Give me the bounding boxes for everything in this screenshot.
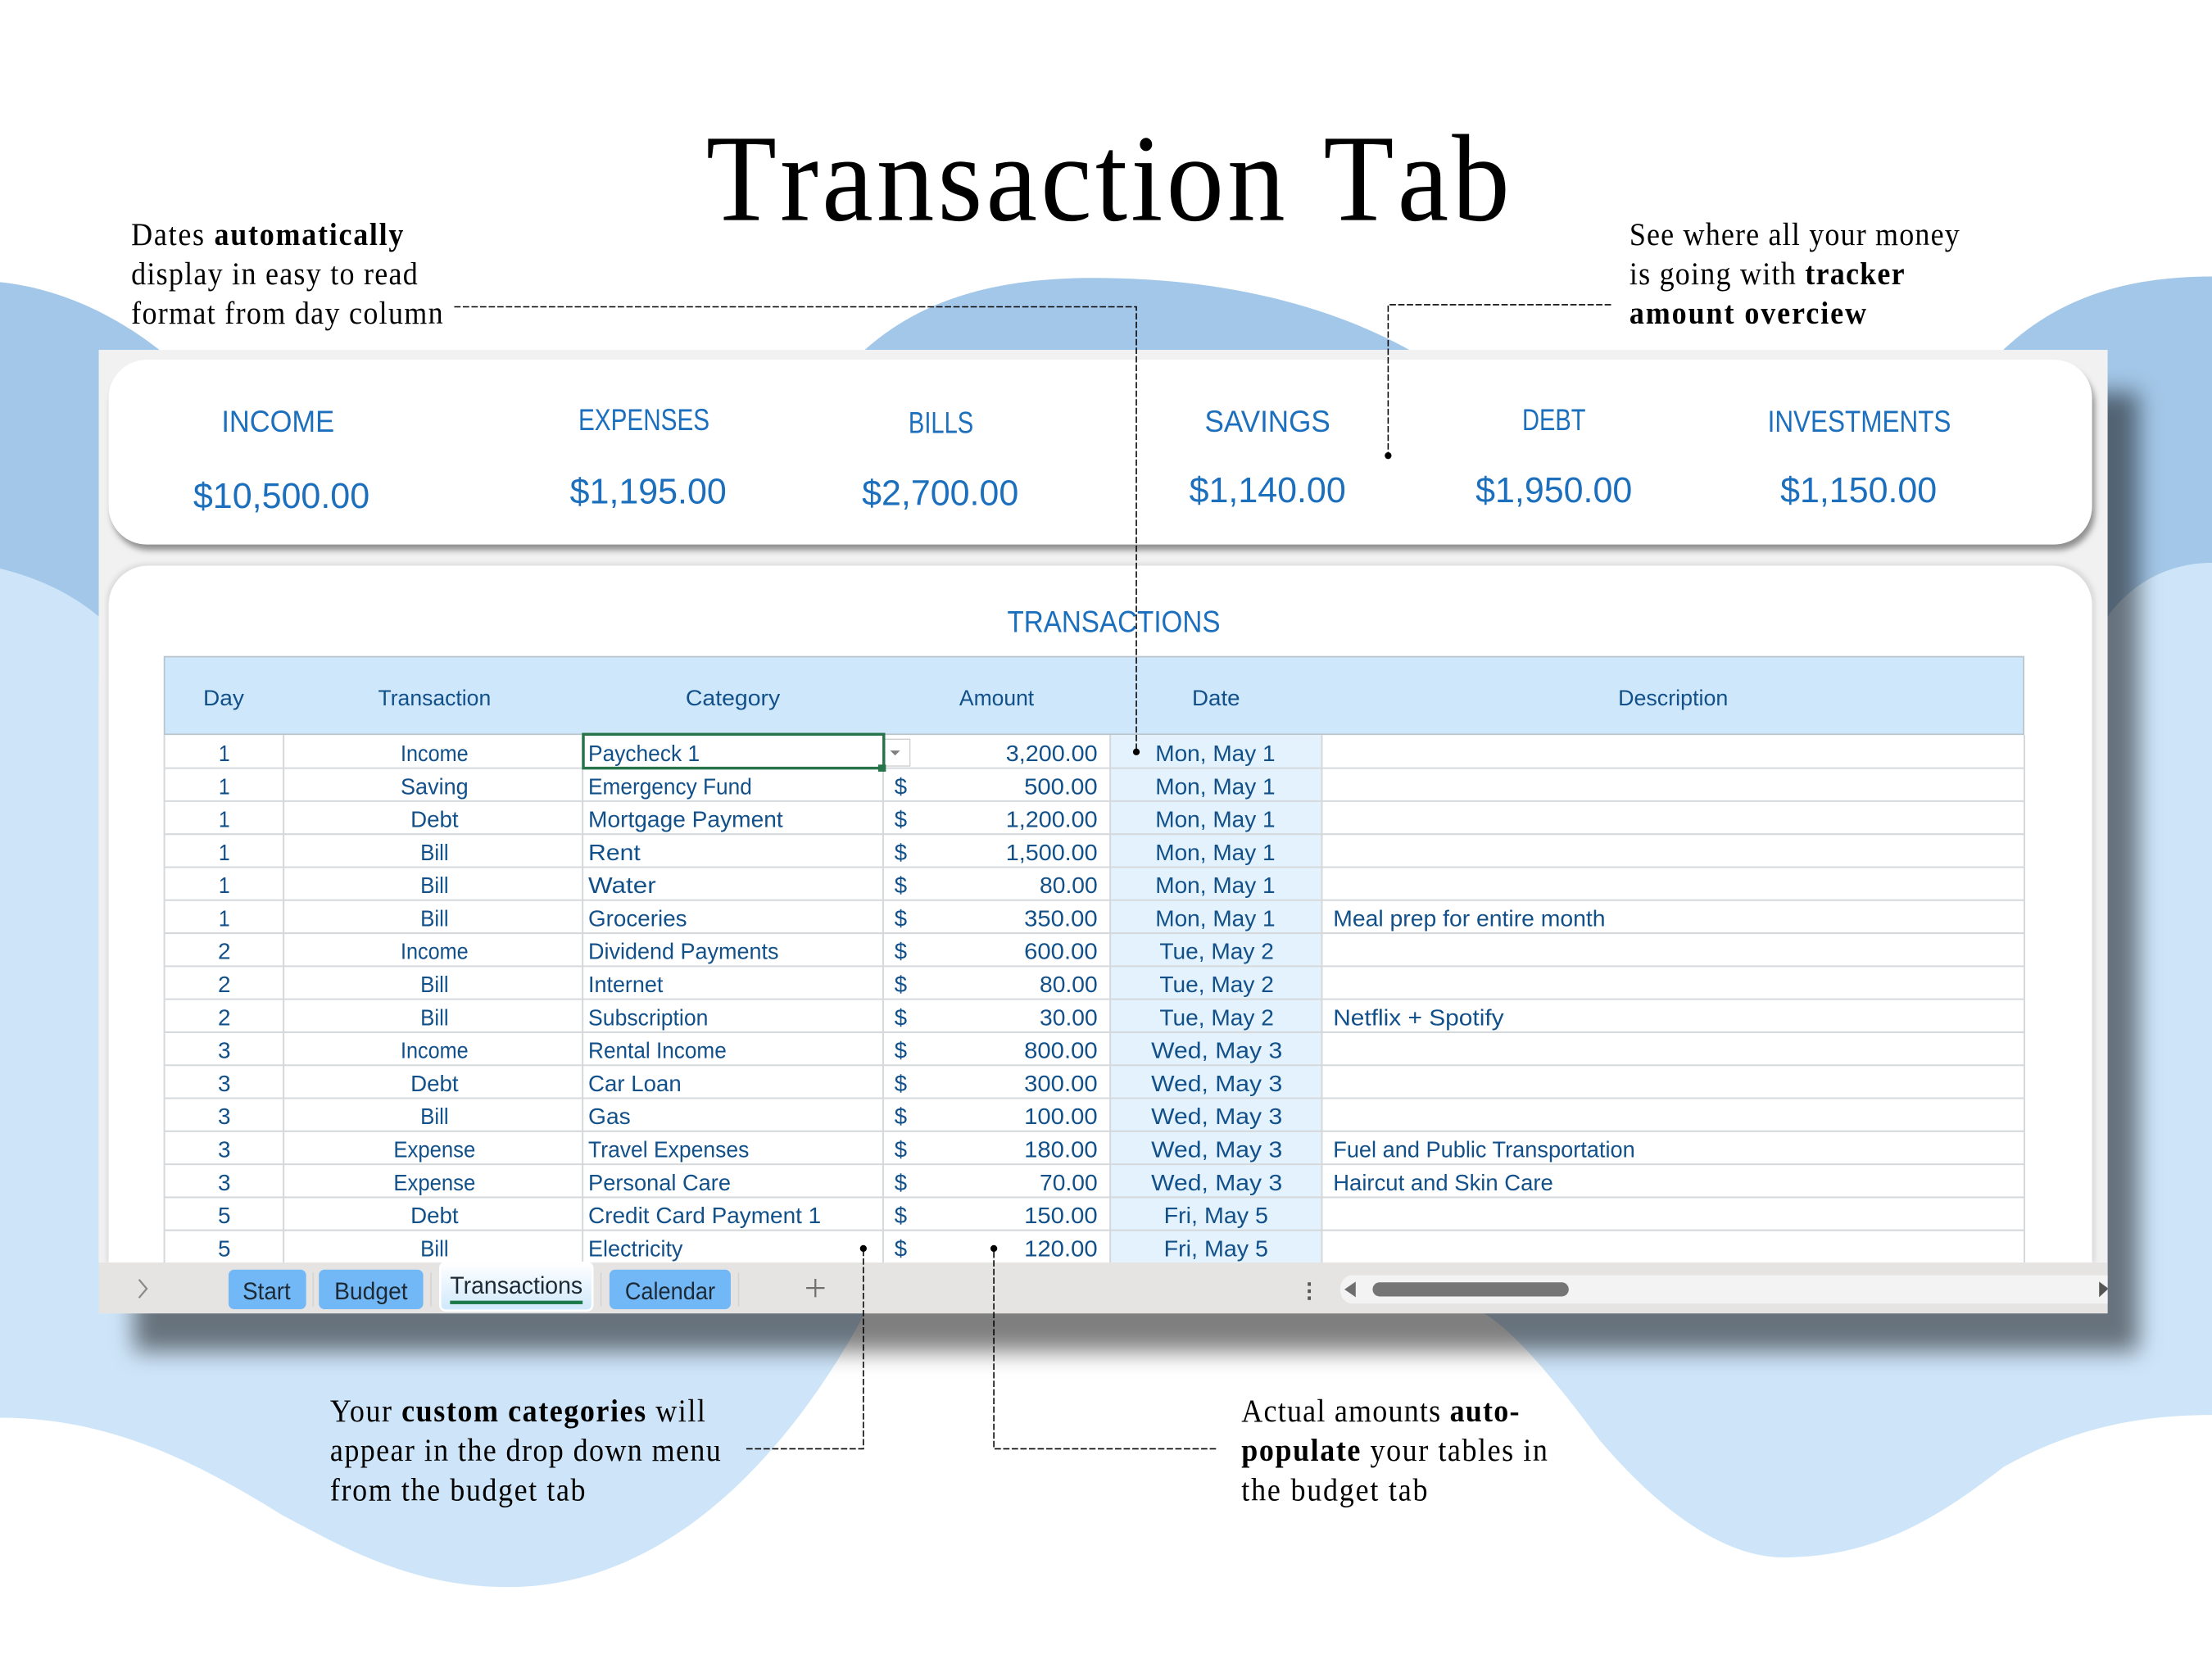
row 16: $ (895, 1235, 907, 1261)
callout: automatic dates (131, 218, 443, 332)
tab: Budget (319, 1270, 424, 1309)
callout: auto-populate: Actual amounts auto- (1241, 1394, 1519, 1429)
callout: auto-populate: populate your tables in (1241, 1434, 1548, 1468)
callout: tracker overview: See where all your money (1630, 218, 1960, 252)
row 10: Income (401, 1038, 469, 1063)
row 2: Saving (401, 773, 469, 799)
row 10: Rental Income (588, 1038, 727, 1063)
row 14: Personal Care (588, 1170, 731, 1195)
row 1: 3,200.00 (1006, 741, 1098, 766)
table header row: Date (1192, 686, 1240, 710)
row 11: 3 (218, 1071, 231, 1096)
row 13: Wed, May 3 (1151, 1137, 1282, 1163)
background wave: light blue shape (0, 563, 2212, 1587)
row 8: 2 (218, 972, 231, 997)
row 9: Subscription (588, 1004, 708, 1030)
row 1: 1 (219, 741, 230, 766)
more options icon (1308, 1282, 1311, 1300)
arrow: categories to dropdown (746, 1245, 867, 1448)
row 15: 5 (218, 1203, 231, 1228)
summary: debt: DEBT (1522, 402, 1585, 437)
row 11: $ (895, 1071, 907, 1096)
row 15 (218, 1203, 1268, 1228)
row 5: Water (588, 873, 656, 898)
chevron icon (139, 1280, 147, 1298)
callout: automatic dates: Dates automatically (131, 218, 404, 252)
row 11: Wed, May 3 (1151, 1071, 1282, 1096)
row 12: Wed, May 3 (1151, 1104, 1282, 1129)
row 14: $ (895, 1170, 907, 1195)
callout: automatic dates: format from day column (131, 297, 443, 332)
scrollbar (1340, 1276, 2108, 1303)
summary: investments: INVESTMENTS (1768, 404, 1951, 438)
row 4: Bill (420, 840, 449, 865)
row 6 (219, 905, 1606, 931)
tab: Start: Start (243, 1279, 291, 1305)
summary: savings: SAVINGS (1205, 404, 1330, 438)
row 2: Mon, May 1 (1155, 773, 1276, 799)
row 9: 30.00 (1040, 1004, 1098, 1030)
row 2 (219, 773, 1276, 799)
row 4 (219, 840, 1276, 865)
transactions table (164, 657, 2024, 1262)
row 16 (218, 1235, 1268, 1261)
row 14: Haircut and Skin Care (1333, 1170, 1553, 1195)
row 16: 5 (218, 1235, 231, 1261)
row 4: Mon, May 1 (1155, 840, 1276, 865)
row 5: Mon, May 1 (1155, 873, 1276, 898)
row 1: Income (401, 741, 469, 766)
row 14: 3 (218, 1170, 231, 1195)
row 6: 1 (219, 905, 230, 931)
row 8: 80.00 (1040, 972, 1098, 997)
row 9: Netflix + Spotify (1333, 1004, 1504, 1030)
row 8 (218, 972, 1274, 997)
summary: bills: BILLS (909, 406, 973, 440)
row 9: Bill (420, 1004, 449, 1030)
row 10: 800.00 (1024, 1038, 1098, 1063)
tab: Calendar: Calendar (625, 1279, 715, 1305)
row 9: 2 (218, 1004, 231, 1030)
summary: income: $10,500.00 (193, 476, 369, 516)
row 13: $ (895, 1137, 907, 1163)
row 16: Fri, May 5 (1164, 1235, 1268, 1261)
table header row (165, 657, 2024, 734)
callout: tracker overview: is going with tracker (1630, 257, 1905, 292)
row 6: 350.00 (1024, 905, 1098, 931)
table header row: Transaction (378, 686, 491, 710)
row 4: 1,500.00 (1006, 840, 1098, 865)
background wave: dark blue shapes (0, 277, 2212, 678)
callout: tracker overview (1630, 218, 1960, 332)
tab: Transactions (active) (440, 1262, 592, 1311)
row 2: 1 (219, 773, 230, 799)
callout: tracker overview: amount overciew (1630, 297, 1866, 332)
row 6: Bill (420, 905, 449, 931)
row 8: Tue, May 2 (1159, 972, 1274, 997)
row 2: 500.00 (1024, 773, 1098, 799)
row 15: 150.00 (1024, 1203, 1098, 1228)
row 10 (218, 1038, 1282, 1063)
row 13: Travel Expenses (588, 1137, 749, 1163)
row 7: 2 (218, 939, 231, 964)
row 2: $ (895, 773, 907, 799)
row 9: Tue, May 2 (1159, 1004, 1274, 1030)
row 13: Expense (393, 1137, 475, 1163)
row 15: Credit Card Payment 1 (588, 1203, 821, 1228)
row 5: $ (895, 873, 907, 898)
row 11 (218, 1071, 1282, 1096)
add sheet icon (806, 1279, 824, 1297)
summary: expenses: EXPENSES (578, 402, 709, 437)
row 3: $ (895, 807, 907, 832)
table header row: Day (203, 686, 245, 710)
callout: custom categories: from the budget tab (330, 1473, 586, 1508)
row 8: Bill (420, 972, 449, 997)
row 12: 100.00 (1024, 1104, 1098, 1129)
summary: investments (1768, 404, 1951, 510)
summary card shadow (111, 367, 2095, 551)
row 12: 3 (218, 1104, 231, 1129)
row 5: 80.00 (1040, 873, 1098, 898)
row 7: Tue, May 2 (1159, 939, 1274, 964)
tab: Start (229, 1270, 306, 1309)
row 11: Car Loan (588, 1071, 682, 1096)
row 3: Mortgage Payment (588, 807, 783, 832)
row 6: Groceries (588, 905, 687, 931)
callout: custom categories: Your custom categories will (330, 1394, 705, 1429)
selected cell with dropdown (583, 734, 910, 772)
row 10: $ (895, 1038, 907, 1063)
row 13: 180.00 (1024, 1137, 1098, 1163)
row 9 (218, 1004, 1504, 1030)
row 3: 1 (219, 807, 230, 832)
row 6: Meal prep for entire month (1333, 905, 1606, 931)
arrow: amounts to amount column (990, 1245, 1216, 1448)
table header row: Category (686, 686, 781, 710)
row 10: Wed, May 3 (1151, 1038, 1282, 1063)
row 16: Electricity (588, 1235, 683, 1261)
summary: income (193, 404, 369, 516)
row 1: Paycheck 1 (588, 741, 700, 766)
summary: bills: $2,700.00 (862, 473, 1018, 513)
summary: bills (862, 406, 1018, 513)
row 11: Debt (410, 1071, 459, 1096)
panel: transactions (109, 565, 2092, 1262)
row 7: $ (895, 939, 907, 964)
row 9: $ (895, 1004, 907, 1030)
title: Transaction Tab (706, 110, 1513, 247)
row 16: Bill (420, 1235, 449, 1261)
row 14 (218, 1170, 1553, 1195)
callout: automatic dates: display in easy to read (131, 257, 418, 292)
arrow: overview to summary (1385, 305, 1611, 459)
row 14: 70.00 (1040, 1170, 1098, 1195)
row 13: Fuel and Public Transportation (1333, 1137, 1635, 1163)
row 15: Fri, May 5 (1164, 1203, 1268, 1228)
row 15: Debt (410, 1203, 459, 1228)
row 8: $ (895, 972, 907, 997)
tab: Transactions (active): Transactions (450, 1273, 582, 1299)
row 8: Internet (588, 972, 664, 997)
row 6: Mon, May 1 (1155, 905, 1276, 931)
row 15: $ (895, 1203, 907, 1228)
row 7: Income (401, 939, 469, 964)
row 4: 1 (219, 840, 230, 865)
row 5: 1 (219, 873, 230, 898)
spreadsheet window shadow (134, 392, 2138, 1352)
row 7 (218, 939, 1274, 964)
row 4: $ (895, 840, 907, 865)
row 13: 3 (218, 1137, 231, 1163)
row 7: Dividend Payments (588, 939, 779, 964)
callout: auto-populate (1241, 1394, 1548, 1508)
row 2: Emergency Fund (588, 773, 752, 799)
row 11: 300.00 (1024, 1071, 1098, 1096)
summary: debt: $1,950.00 (1475, 470, 1632, 510)
row 7: 600.00 (1024, 939, 1098, 964)
tab: Calendar (610, 1270, 731, 1309)
callout: custom categories (330, 1394, 721, 1508)
row 5 (219, 873, 1276, 898)
row 6: $ (895, 905, 907, 931)
row 1: Mon, May 1 (1155, 741, 1276, 766)
summary: savings: $1,140.00 (1190, 470, 1346, 510)
row 14: Expense (393, 1170, 475, 1195)
summary: income: INCOME (221, 404, 334, 438)
row 14: Wed, May 3 (1151, 1170, 1282, 1195)
row 10: 3 (218, 1038, 231, 1063)
row 16: 120.00 (1024, 1235, 1098, 1261)
summary: expenses: $1,195.00 (570, 472, 727, 512)
row 13 (218, 1137, 1635, 1163)
row 3: Mon, May 1 (1155, 807, 1276, 832)
row 4: Rent (588, 840, 641, 865)
transactions heading: TRANSACTIONS (1007, 604, 1220, 638)
row 3: 1,200.00 (1006, 807, 1098, 832)
sheet tab bar (99, 1262, 2108, 1313)
row 12: $ (895, 1104, 907, 1129)
table header row: Amount (959, 686, 1035, 710)
panel: tracker amount overview (109, 360, 2092, 545)
row 12: Bill (420, 1104, 449, 1129)
row 3: Debt (410, 807, 459, 832)
row 5: Bill (420, 873, 449, 898)
row 12 (218, 1104, 1282, 1129)
row 1 (219, 741, 1276, 766)
spreadsheet window (99, 350, 2108, 1313)
callout: custom categories: appear in the drop down menu (330, 1434, 721, 1468)
transactions card shadow (107, 564, 2096, 1262)
summary: expenses (570, 402, 727, 512)
summary: debt (1475, 402, 1632, 510)
table header row: Description (1618, 686, 1728, 710)
callout: auto-populate: the budget tab (1241, 1473, 1428, 1508)
arrow: dates to date column (454, 307, 1140, 755)
summary: investments: $1,150.00 (1780, 470, 1937, 510)
summary: savings (1190, 404, 1346, 510)
row 3 (219, 807, 1276, 832)
date column shading (1110, 735, 1321, 1262)
tab: Budget: Budget (334, 1279, 408, 1305)
row 12: Gas (588, 1104, 631, 1129)
